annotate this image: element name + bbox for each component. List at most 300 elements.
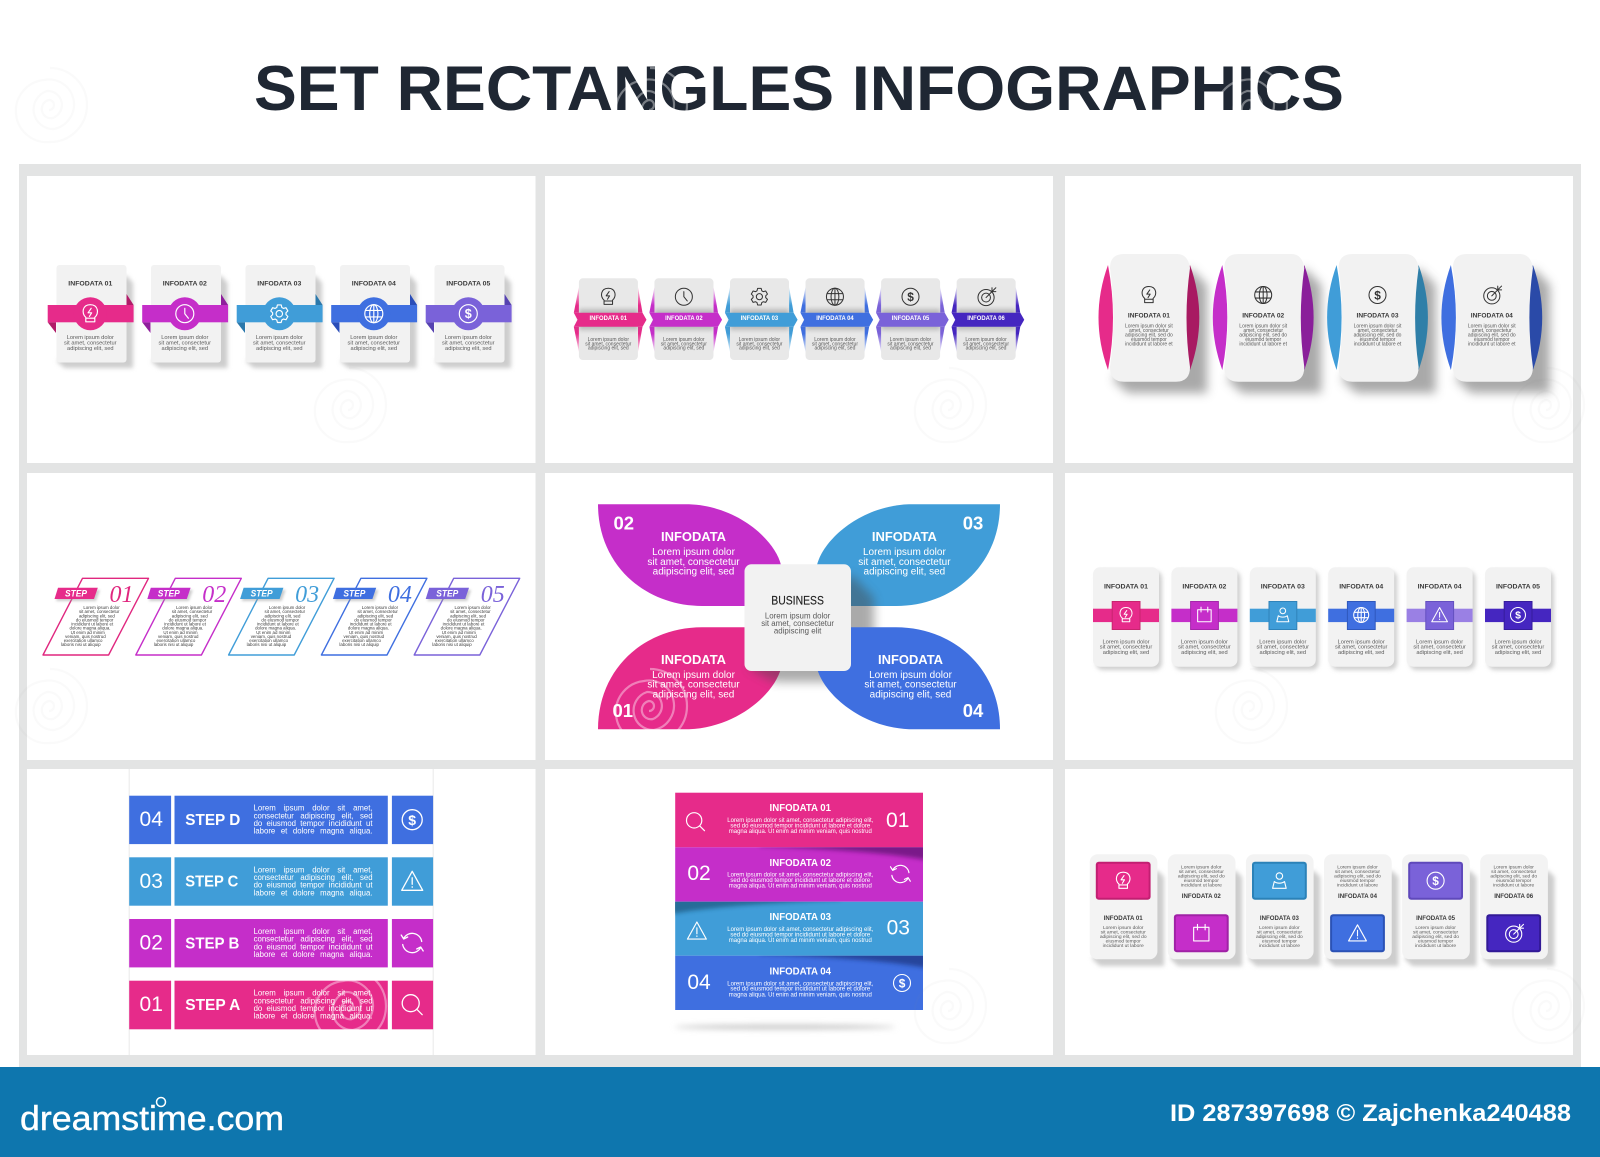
card 01: sit amet, consectetur xyxy=(1100,645,1152,651)
panel: ribbon cards with circles xyxy=(48,265,512,368)
row 04: INFODATA 04 xyxy=(770,966,831,978)
step 04: sit amet, consectetur xyxy=(357,609,398,614)
card 03: sit amet, consectetur xyxy=(1257,645,1309,651)
card 01: adipiscing elit, sed xyxy=(67,346,114,352)
card 06: Lorem ipsum dolor xyxy=(965,337,1007,343)
card 02: eiusmod tempor xyxy=(1245,337,1281,343)
card 05: adipiscing elit, sed xyxy=(890,346,931,352)
step 01: sit amet, consectetur xyxy=(79,609,120,614)
step 01: incididunt ut labore et xyxy=(71,621,114,626)
row 04: 04 xyxy=(687,971,711,994)
card 02: eiusmod tempor xyxy=(1184,878,1219,884)
leaf 01: 01 xyxy=(613,700,633,721)
card 01: Lorem ipsum dolor xyxy=(1103,925,1144,931)
card 02: incididunt ut labore et xyxy=(1239,342,1288,348)
leaf 03: 03 xyxy=(963,512,983,534)
card 05: incididunt ut labore xyxy=(1415,943,1456,949)
row 03: INFODATA 03 xyxy=(770,912,831,923)
leaf 02: Lorem ipsum dolor xyxy=(652,547,736,558)
card 04: INFODATA 04 xyxy=(1471,312,1513,320)
step 02: laboris nisi ut aliquip xyxy=(154,642,194,647)
card 04 xyxy=(800,278,873,360)
card 05: $ xyxy=(1432,874,1439,888)
card 03: Lorem ipsum dolor xyxy=(1259,639,1306,645)
card 03: Lorem ipsum dolor xyxy=(256,335,303,341)
leaf 03 xyxy=(817,504,1000,606)
row 02 xyxy=(675,842,926,902)
center card: business xyxy=(744,564,851,671)
row 01: 01 xyxy=(140,993,163,1016)
card 02: Lorem ipsum dolor sit xyxy=(1239,324,1288,330)
step 01 xyxy=(43,578,148,655)
card 06: eiusmod tempor xyxy=(1496,878,1532,884)
row 01: do eiusmod tempor incididunt ut xyxy=(254,1004,373,1012)
row 03: Lorem ipsum dolor sit amet, consectetur adipiscing elit, xyxy=(727,927,874,933)
card 06: sit amet, consectetur xyxy=(1491,869,1537,875)
panel: alternating cards with colour boxes xyxy=(1090,854,1554,966)
row 01: STEP A xyxy=(185,997,240,1014)
step 04: incididunt ut labore et xyxy=(350,621,392,626)
card 04: Lorem ipsum dolor sit xyxy=(1468,324,1516,330)
leaf 02 xyxy=(598,504,781,606)
center card: business: sit amet, consectetur xyxy=(761,619,834,628)
leaf 04: sit amet, consectetur xyxy=(864,680,957,690)
step 03: veniam, quis nostrud xyxy=(251,633,292,638)
step 03: dolore magna aliqua. xyxy=(255,625,296,630)
card 05 xyxy=(1407,567,1476,670)
card 04: incididunt ut labore et xyxy=(1468,342,1516,348)
row 01: consectetur adipiscing elit, sed xyxy=(254,996,373,1005)
card 06: incididunt ut labore xyxy=(1493,882,1535,888)
row 02: do eiusmod tempor incididunt ut xyxy=(254,942,373,951)
center card: business: BUSINESS xyxy=(771,595,824,607)
card 03: Lorem ipsum dolor xyxy=(739,337,780,343)
step 01: STEP xyxy=(65,588,88,598)
card 03: adipiscing elit, sed do xyxy=(1354,333,1402,339)
card 04: adipiscing elit, sed do xyxy=(1468,333,1516,339)
card 02 xyxy=(142,265,228,368)
card 02: INFODATA 02 xyxy=(1242,312,1285,320)
row 02: labore et dolore magna aliqua. xyxy=(254,950,373,958)
card 02: adipiscing elit, sed do xyxy=(1239,333,1287,339)
step 01: Ut enim ad minim xyxy=(71,629,105,634)
step 04: Lorem ipsum dolor xyxy=(362,604,399,610)
row 01: INFODATA 01 xyxy=(770,803,831,814)
step 01: veniam, quis nostrud xyxy=(65,633,106,638)
card 03: Lorem ipsum dolor sit xyxy=(1354,324,1402,330)
card 05 xyxy=(426,265,512,368)
step 02: Lorem ipsum dolor xyxy=(176,604,213,610)
leaf 02: adipiscing elit, sed xyxy=(653,566,734,578)
card 03: eiusmod tempor xyxy=(1262,938,1297,944)
step 01: Lorem ipsum dolor xyxy=(83,604,120,610)
square long shadow xyxy=(748,574,874,682)
row 04: do eiusmod tempor incididunt ut xyxy=(254,818,373,828)
step 04: do eiusmod tempor xyxy=(354,617,392,622)
step 02: dolore magna aliqua. xyxy=(162,625,203,630)
step 02: exercitation ullamco xyxy=(156,638,196,643)
panel: band cards with square icons xyxy=(1093,567,1554,670)
card 01: sit amet, consectetur xyxy=(64,341,117,347)
row 04: magna aliqua. Ut enim ad minim veniam, quis nostrud xyxy=(729,992,872,998)
card 04: incididunt ut labore xyxy=(1337,882,1378,888)
panel backgrounds xyxy=(27,176,1573,1055)
card 01 xyxy=(574,278,646,360)
step 03 xyxy=(229,578,334,655)
row 01: 01 xyxy=(886,809,909,832)
leaf 04: 04 xyxy=(963,700,984,721)
card 05: adipiscing elit, sed do xyxy=(1412,934,1459,940)
step 03: do eiusmod tempor xyxy=(261,617,300,622)
step 01: 01 xyxy=(110,582,134,608)
card 03: INFODATA 03 xyxy=(257,280,302,288)
leaf 02: INFODATA xyxy=(661,529,727,544)
step 05: Lorem ipsum dolor xyxy=(455,604,491,610)
card 04: sit amet, consectetur xyxy=(348,341,400,347)
card 06 xyxy=(952,278,1024,360)
card 05: $ xyxy=(907,290,914,304)
card 02: sit amet, consectetur xyxy=(159,341,211,347)
card 01: eiusmod tempor xyxy=(1106,938,1141,944)
row 01 xyxy=(129,981,433,1029)
row 02: 02 xyxy=(140,932,163,954)
card 06: INFODATA 05 xyxy=(1496,584,1540,590)
step 01: do eiusmod tempor xyxy=(76,617,114,622)
card 06: Lorem ipsum dolor xyxy=(1493,864,1534,870)
card 05: Lorem ipsum dolor xyxy=(890,337,932,343)
card 04: eiusmod tempor xyxy=(1340,878,1375,884)
step 05: Ut enim ad minim xyxy=(442,629,476,634)
leaf 02: 02 xyxy=(614,512,634,534)
card 03: INFODATA 03 xyxy=(741,316,779,322)
step 04 xyxy=(321,578,427,655)
card 04: INFODATA 04 xyxy=(1339,584,1384,590)
card 05: Lorem ipsum dolor xyxy=(445,335,492,341)
leaf 01: Lorem ipsum dolor xyxy=(652,670,736,681)
step 02: incididunt ut labore et xyxy=(164,621,207,626)
row 01: sed do eiusmod tempor incididunt ut labore et dolore xyxy=(730,823,871,829)
card 03: INFODATA 03 xyxy=(1260,915,1299,922)
grid frame xyxy=(19,164,1581,1067)
card 03: $ xyxy=(1374,288,1381,302)
step 04: 04 xyxy=(388,582,412,608)
leaf 01: INFODATA xyxy=(661,652,727,667)
center card: business: adipiscing elit xyxy=(774,626,822,636)
step 02: veniam, quis nostrud xyxy=(158,633,199,638)
card 06 xyxy=(1485,567,1554,670)
card 03: INFODATA 03 xyxy=(1261,584,1305,590)
row 02: sed do eiusmod tempor incididunt ut labore et dolore xyxy=(730,878,871,884)
card 03: sit amet, consectetur xyxy=(1257,929,1302,935)
footer bar xyxy=(0,1067,1600,1157)
card 04 xyxy=(1324,854,1398,966)
card 01: INFODATA 01 xyxy=(1128,312,1170,320)
row 01: labore et dolore magna aliqua. xyxy=(254,1011,373,1020)
card 03 xyxy=(1327,254,1436,393)
step 05: incididunt ut labore et xyxy=(443,621,485,626)
step 03: exercitation ullamco xyxy=(249,638,289,643)
step 03: Lorem ipsum dolor xyxy=(269,604,306,610)
step 02: 02 xyxy=(202,582,226,608)
row 03: consectetur adipiscing elit, sed xyxy=(254,872,373,882)
card 02 xyxy=(1171,567,1240,670)
card 01: incididunt ut labore xyxy=(1103,943,1144,949)
card 04: adipiscing elit, sed xyxy=(1338,650,1384,656)
ground shadow xyxy=(675,1024,895,1030)
leaf 02: sit amet, consectetur xyxy=(647,557,740,568)
card 01: sit amet, consectetur xyxy=(585,341,632,347)
leaf 01: adipiscing elit, sed xyxy=(653,690,734,700)
leaf 04: adipiscing elit, sed xyxy=(870,690,951,700)
card 04 xyxy=(1328,567,1397,670)
card 02: adipiscing elit, sed xyxy=(1181,650,1228,656)
card 05: INFODATA 05 xyxy=(1416,915,1456,922)
card 05: Lorem ipsum dolor xyxy=(1416,639,1463,645)
leaf 03: adipiscing elit, sed xyxy=(864,566,945,578)
row 04: STEP D xyxy=(185,812,240,829)
card 05: sit amet, consectetur xyxy=(1413,645,1466,651)
card 02: adipiscing elit, sed xyxy=(162,346,208,352)
card 04: Lorem ipsum dolor xyxy=(814,337,856,343)
card 05: sit amet, consectetur xyxy=(887,341,934,347)
card 06: Lorem ipsum dolor xyxy=(1494,639,1542,645)
center card: business: Lorem ipsum dolor xyxy=(765,612,831,620)
row 03 xyxy=(672,896,923,956)
leaf 03: Lorem ipsum dolor xyxy=(863,547,946,558)
row 03 xyxy=(129,857,433,906)
step 03: laboris nisi ut aliquip xyxy=(247,642,287,647)
card 02: Lorem ipsum dolor xyxy=(1181,864,1222,870)
card 02: incididunt ut labore xyxy=(1181,882,1222,888)
row 04: $ xyxy=(899,976,906,990)
panel: step rows xyxy=(128,769,434,1055)
step 01: dolore magna aliqua. xyxy=(69,625,111,630)
card 02: adipiscing elit, sed do xyxy=(1178,874,1225,880)
row 01 xyxy=(675,793,923,847)
card 04: INFODATA 04 xyxy=(352,280,396,288)
step 03: Ut enim ad minim xyxy=(256,629,291,634)
card 02: Lorem ipsum dolor xyxy=(1181,639,1228,645)
card 03: eiusmod tempor xyxy=(1360,337,1396,343)
card 03: incididunt ut labore xyxy=(1259,943,1300,949)
card 03: INFODATA 03 xyxy=(1357,312,1399,320)
step 03: 03 xyxy=(295,582,319,608)
step 05 xyxy=(414,578,520,655)
card 05: INFODATA 05 xyxy=(892,316,930,322)
step 02: adipiscing elit, sed xyxy=(172,613,208,618)
card 04: Lorem ipsum dolor xyxy=(1338,639,1385,645)
footer image id: ID 287397698 © Zajchenka240488 xyxy=(1170,1100,1571,1127)
card 04: INFODATA 04 xyxy=(816,316,854,322)
step 04: dolore magna aliqua. xyxy=(348,625,389,630)
card 01: adipiscing elit, sed do xyxy=(1125,333,1173,339)
row 03: STEP C xyxy=(185,874,238,891)
card 03 xyxy=(1246,854,1320,966)
card 05: adipiscing elit, sed xyxy=(1416,650,1463,656)
card 03 xyxy=(237,265,323,368)
leaf 03: sit amet, consectetur xyxy=(858,557,951,568)
card 03: amet, consectetur xyxy=(1358,328,1398,334)
card 05: sit amet, consectetur xyxy=(1413,929,1459,935)
row 02: consectetur adipiscing elit, sed xyxy=(254,934,373,943)
card 03: adipiscing elit, sed xyxy=(739,346,780,352)
row 02: 02 xyxy=(687,862,711,885)
card 04: Lorem ipsum dolor xyxy=(1337,864,1378,870)
row 02: Lorem ipsum dolor sit amet, consectetur adipiscing elit, xyxy=(727,873,874,879)
card 02: adipiscing elit, sed xyxy=(663,346,704,352)
card 02 xyxy=(649,278,722,360)
card 05: adipiscing elit, sed xyxy=(445,346,492,352)
card 01: Lorem ipsum dolor xyxy=(1102,639,1150,645)
leaf 01: sit amet, consectetur xyxy=(647,680,740,690)
panel: butterfly leaves around business square xyxy=(598,504,1000,729)
card 05: Lorem ipsum dolor xyxy=(1415,925,1456,931)
step 04: laboris nisi ut aliquip xyxy=(339,642,380,647)
step 03: adipiscing elit, sed xyxy=(265,613,301,618)
step 05: dolore magna aliqua. xyxy=(441,625,482,630)
card 04: adipiscing elit, sed xyxy=(815,346,856,352)
step 01: laboris nisi ut aliquip xyxy=(61,642,101,647)
step 05: 05 xyxy=(481,582,505,608)
card 01: eiusmod tempor xyxy=(1131,337,1167,343)
card 01 xyxy=(1093,567,1162,670)
row 04: sed do eiusmod tempor incididunt ut labore et dolore xyxy=(730,987,871,993)
row 04: Lorem ipsum dolor sit amet, consectetur adipiscing elit, xyxy=(727,981,874,987)
card 02: amet, consectetur xyxy=(1243,328,1283,334)
card 03: sit amet, consectetur xyxy=(736,341,783,347)
card 06: $ xyxy=(1515,609,1521,621)
row 03: 03 xyxy=(887,916,910,940)
card 06: INFODATA 06 xyxy=(1494,893,1534,900)
row 03: do eiusmod tempor incididunt ut xyxy=(254,880,373,889)
card 04: adipiscing elit, sed do xyxy=(1334,874,1381,880)
card 03: Lorem ipsum dolor xyxy=(1259,925,1300,931)
card 03: sit amet, consectetur xyxy=(253,341,306,347)
card 04: sit amet, consectetur xyxy=(812,341,858,347)
panel: slanted outline steps xyxy=(43,578,520,655)
card 02: sit amet, consectetur xyxy=(1178,645,1231,651)
card 01 xyxy=(48,265,134,368)
row 04: labore et dolore magna aliqua. xyxy=(254,826,373,835)
step 01: adipiscing elit, sed xyxy=(79,613,115,618)
row 01: Lorem ipsum dolor sit amet, consectetur adipiscing elit, xyxy=(727,818,874,824)
step 05: do eiusmod tempor xyxy=(447,617,485,622)
card 02 xyxy=(1168,854,1242,966)
step 02 xyxy=(136,578,241,655)
card 05: eiusmod tempor xyxy=(1418,938,1453,944)
row 03: magna aliqua. Ut enim ad minim veniam, quis nostrud xyxy=(729,938,872,944)
leaf 03: INFODATA xyxy=(872,529,938,544)
row 04: Lorem ipsum dolor sit amet, xyxy=(254,803,373,812)
card 02: Lorem ipsum dolor xyxy=(161,335,208,341)
step 05: STEP xyxy=(436,588,459,598)
card 04 xyxy=(331,265,417,368)
leaf 04: Lorem ipsum dolor xyxy=(869,670,953,681)
card 02: sit amet, consectetur xyxy=(1179,869,1224,875)
card 03: adipiscing elit, sed xyxy=(1260,650,1306,656)
step 03: incididunt ut labore et xyxy=(257,621,300,626)
row 01: magna aliqua. Ut enim ad minim veniam, quis nostrud xyxy=(729,829,872,835)
card 04: eiusmod tempor xyxy=(1474,337,1510,343)
step 04: Ut enim ad minim xyxy=(349,629,384,634)
card 01: adipiscing elit, sed xyxy=(588,346,629,352)
panel: arrow band cards xyxy=(574,278,1024,360)
step 02: do eiusmod tempor xyxy=(169,617,207,622)
card 01: INFODATA 01 xyxy=(1104,584,1148,590)
card 06: INFODATA 06 xyxy=(967,316,1005,322)
step 05: veniam, quis nostrud xyxy=(436,633,477,638)
card 03: adipiscing elit, sed xyxy=(256,346,303,352)
panel: stacked folded rows xyxy=(672,793,926,1030)
card 03 xyxy=(1250,567,1319,670)
card 01: Lorem ipsum dolor sit xyxy=(1125,324,1173,330)
row 04: $ xyxy=(408,812,416,828)
step 05: exercitation ullamco xyxy=(435,638,474,643)
leaf 04 xyxy=(817,627,1000,729)
card 06: adipiscing elit, sed xyxy=(1495,650,1541,656)
card 06 xyxy=(1480,854,1554,966)
row 02: STEP B xyxy=(185,935,239,952)
step 04: veniam, quis nostrud xyxy=(344,633,385,638)
card 03 xyxy=(725,278,798,360)
card 02 xyxy=(1213,254,1321,393)
card 04: sit amet, consectetur xyxy=(1335,869,1380,875)
row 04: 04 xyxy=(140,808,163,831)
row 04 xyxy=(675,956,923,1010)
card 02: sit amet, consectetur xyxy=(661,341,707,347)
footer logo: dreamstime.com xyxy=(20,1100,284,1138)
card 01: incididunt ut labore et xyxy=(1125,342,1173,348)
card 04: sit amet, consectetur xyxy=(1335,645,1388,651)
step 02: Ut enim ad minim xyxy=(163,629,198,634)
step 01: exercitation ullamco xyxy=(64,638,103,643)
leaf 01 xyxy=(598,627,781,729)
step 03: sit amet, consectetur xyxy=(265,609,306,614)
card 01: INFODATA 01 xyxy=(1104,915,1143,922)
step 04: exercitation ullamco xyxy=(342,638,381,643)
row 02: INFODATA 02 xyxy=(770,858,831,869)
card 01: Lorem ipsum dolor xyxy=(67,335,114,341)
card 01 xyxy=(1090,854,1164,966)
card 02: INFODATA 02 xyxy=(665,316,703,322)
card 04: adipiscing elit, sed xyxy=(351,346,397,352)
card 05 xyxy=(876,278,949,360)
row 03: sed do eiusmod tempor incididunt ut labore et dolore xyxy=(730,932,871,938)
card 01: amet, consectetur xyxy=(1129,328,1169,334)
card 04: INFODATA 04 xyxy=(1338,893,1377,900)
step 04: STEP xyxy=(343,588,366,598)
card 01: adipiscing elit, sed do xyxy=(1100,934,1147,940)
card 02: INFODATA 02 xyxy=(1182,893,1221,900)
card 02: INFODATA 02 xyxy=(1182,584,1227,590)
card 04: Lorem ipsum dolor xyxy=(350,335,397,341)
card 02: INFODATA 02 xyxy=(163,280,207,288)
step 02: sit amet, consectetur xyxy=(172,609,213,614)
row 04: consectetur adipiscing elit, sed xyxy=(254,811,373,820)
card 06: adipiscing elit, sed xyxy=(966,346,1007,352)
card 04 xyxy=(1441,254,1550,393)
step 02: STEP xyxy=(158,588,181,598)
card 01: adipiscing elit, sed xyxy=(1103,650,1149,656)
card 01: Lorem ipsum dolor xyxy=(588,337,629,343)
step 05: sit amet, consectetur xyxy=(450,609,491,614)
card 04: amet, consectetur xyxy=(1472,328,1512,334)
row 04 xyxy=(129,796,433,844)
card 06: sit amet, consectetur xyxy=(1492,645,1544,651)
card 01: sit amet, consectetur xyxy=(1101,929,1146,935)
card 05: $ xyxy=(465,307,472,321)
row 02 xyxy=(129,919,433,967)
